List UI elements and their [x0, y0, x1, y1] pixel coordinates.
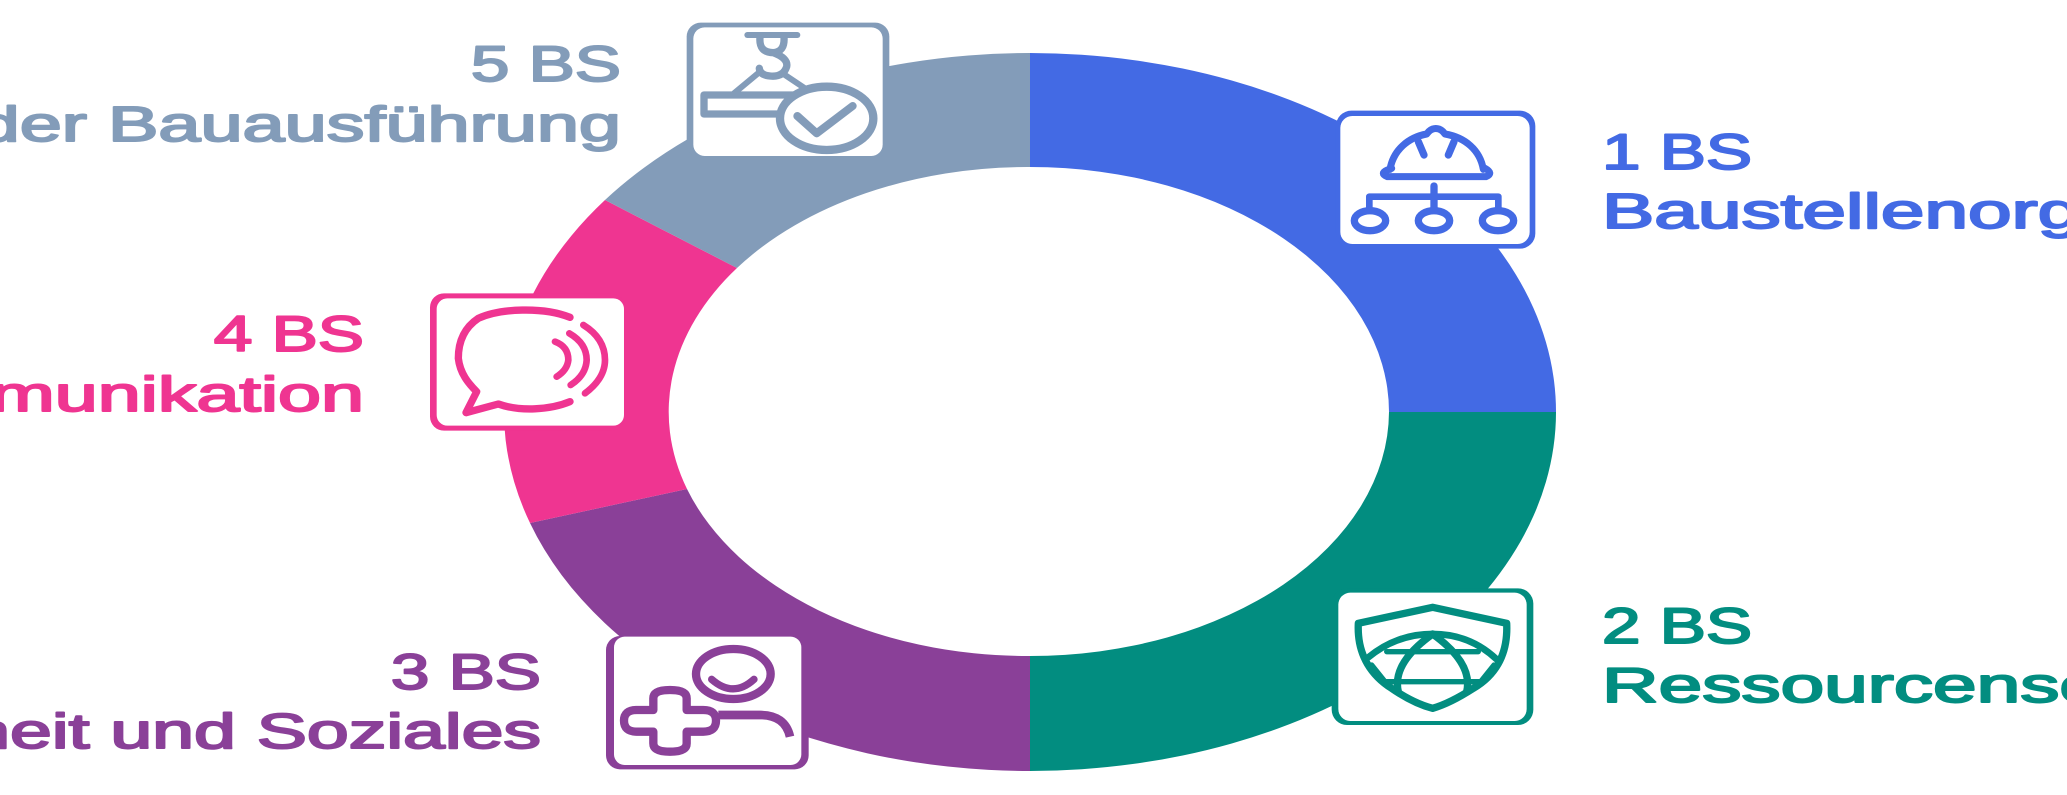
segment 4: pink — [504, 200, 737, 523]
segment 2: teal — [1030, 412, 1556, 771]
segment 5: grey blue — [605, 53, 1030, 268]
icon: person with health cross — [606, 636, 809, 769]
icon: shield with globe — [1332, 588, 1533, 725]
label: 4 BS Kommunikation: 4 BS — [214, 305, 364, 362]
label: 3 BS Gesundheit und Soziales — [0, 643, 541, 759]
label: 2 BS Ressourcenschutz: 2 BS — [1602, 597, 1752, 654]
label: 1 BS Baustellenorganisation — [1602, 123, 2067, 238]
label: 2 BS Ressourcenschutz — [1602, 597, 2067, 712]
icon: crane hook with check mark — [687, 23, 889, 158]
label: 5 BS Qualität der Bauausführung: 5 BS — [471, 35, 621, 92]
donut chart — [504, 53, 1556, 771]
segment 3: purple — [530, 489, 1030, 771]
icon: speech bubble with sound waves — [430, 293, 625, 431]
label: 1 BS Baustellenorganisation: 1 BS — [1602, 123, 1752, 180]
label: 5 BS Qualität der Bauausführung — [0, 35, 621, 152]
label: 3 BS Gesundheit und Soziales: 3 BS — [391, 643, 541, 700]
label: 4 BS Kommunikation — [0, 305, 364, 422]
icon: site organisation helmet — [1336, 111, 1535, 249]
segment 1: blue — [1030, 53, 1556, 412]
